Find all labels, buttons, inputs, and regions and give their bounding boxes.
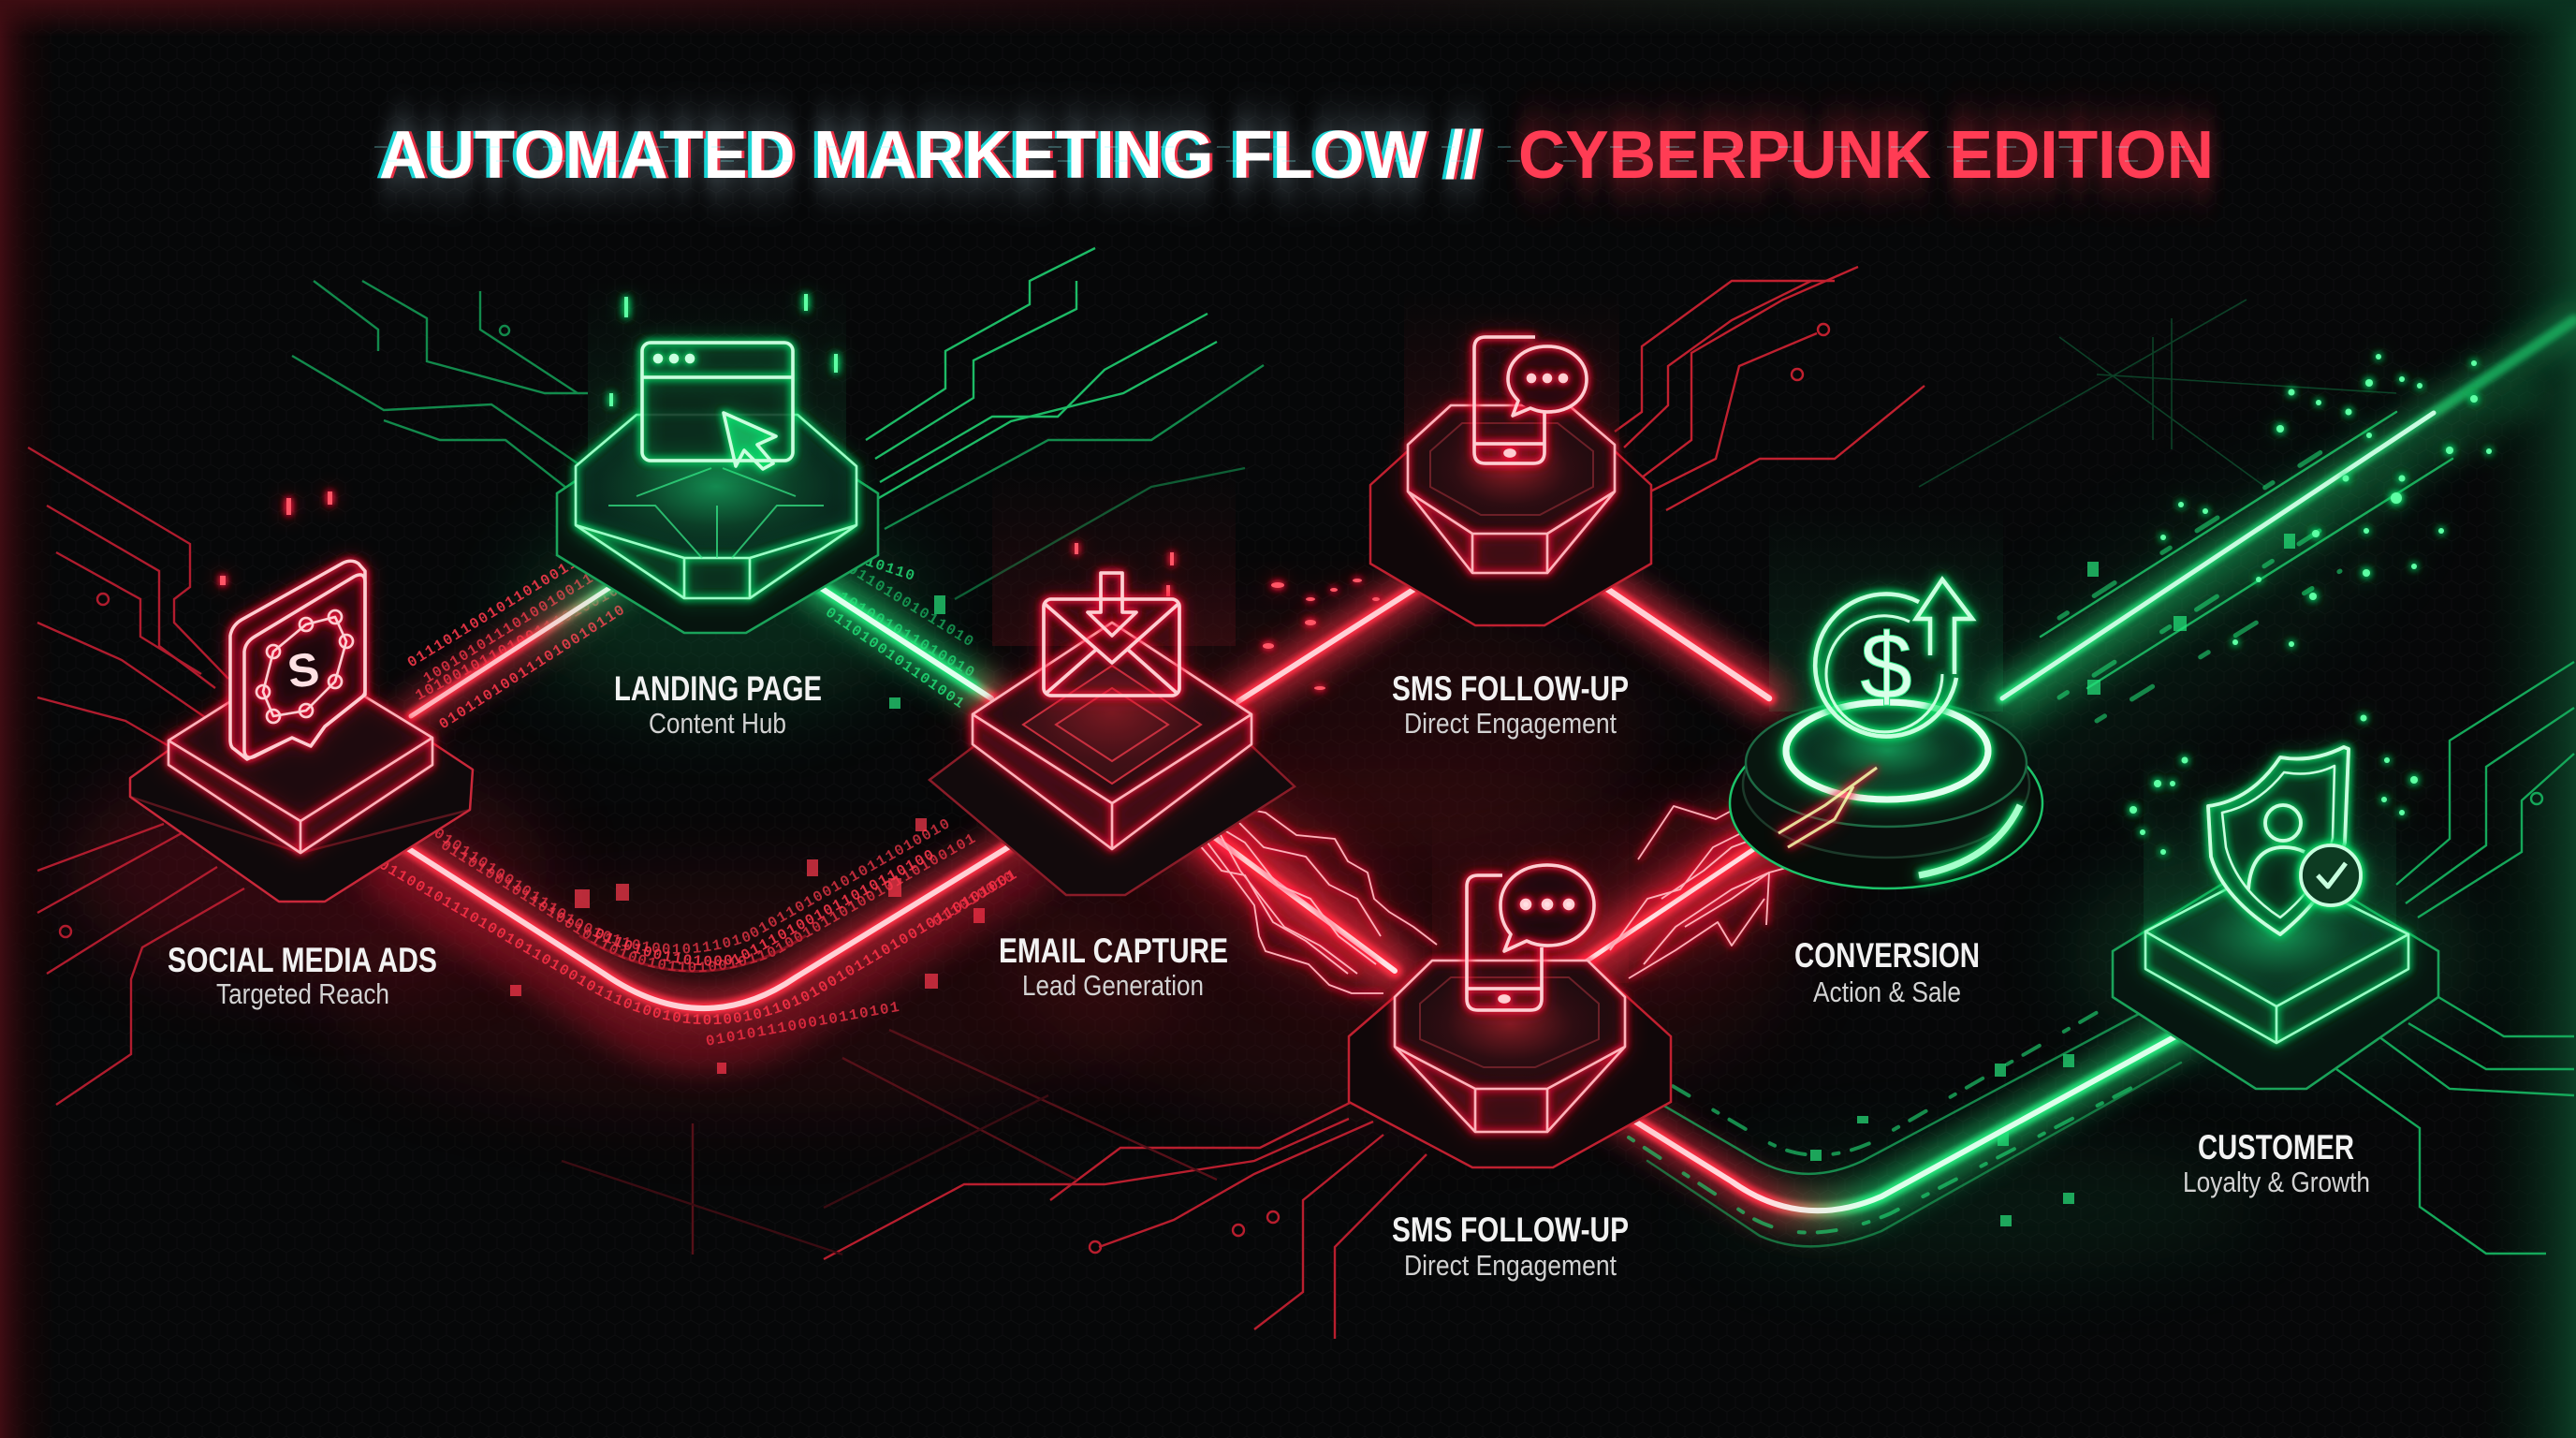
node: customer (2113, 747, 2438, 1089)
icon: check badge (2301, 845, 2361, 905)
plate top fill (2145, 866, 2408, 1006)
inner diamonds (1023, 666, 1201, 784)
plate side fill (2145, 932, 2408, 1043)
glowing ring (1786, 702, 1988, 800)
glass plate fill (168, 657, 432, 821)
binary data streams: 0111011001011010011101001011010101011010 (408, 563, 575, 667)
title glow (379, 118, 2214, 193)
label: social media ads: Targeted Reach (216, 977, 389, 1010)
platform base (2113, 852, 2438, 1089)
glass plate outline (168, 657, 432, 853)
binary data streams: 0110100101101001011010010110 (850, 568, 973, 645)
label: sms follow-up bottom (1392, 1211, 1629, 1282)
label: email capture (999, 932, 1228, 1002)
node: conversion (1730, 580, 2042, 888)
circuit traces: green upper (292, 248, 1264, 599)
icon: envelope with arrow (1044, 573, 1179, 696)
title glow: CYBERPUNK EDITION (1518, 118, 2214, 193)
node: landing page (557, 343, 878, 633)
binary data streams: 01101001011010010110100101101001011010010110100101101001011010010110100101101 (442, 833, 975, 972)
front face fill (1395, 1047, 1625, 1132)
plate side fill (973, 714, 1251, 849)
glitch ticks (374, 147, 2220, 161)
beam: social to landing (411, 580, 622, 716)
binary data streams: 10010110100101110100101101001011101001011010010101110100101101001011010010111010010110101 (434, 819, 949, 954)
label: social media ads: SOCIAL MEDIA ADS (168, 941, 437, 979)
binary data streams: 1010010110100101101001011010 (842, 593, 973, 676)
ring interior (1786, 702, 1988, 800)
octagon top fill (1395, 961, 1625, 1089)
label: social media ads (168, 941, 437, 1010)
label: customer: Loyalty & Growth (2183, 1166, 2370, 1198)
circuit traces: red upper right (1615, 267, 1925, 510)
title glow: AUTOMATED MARKETING FLOW // (379, 118, 1482, 193)
icon dollar sign: $ (1860, 614, 1912, 719)
title chromatic layers: AUTOMATED MARKETING FLOW // (382, 118, 1485, 193)
octagon outline (1408, 405, 1615, 573)
binary data streams: 01010111000101101010011 (0, 0, 902, 1050)
octagon base (557, 440, 878, 633)
label: sms follow-up top (1392, 669, 1629, 740)
binary data streams: 0101101001110100101101010110101001110101 (440, 605, 623, 728)
binary data streams: 1001010111010010011010110100101101101001 (423, 574, 593, 683)
faint green grid upper right (1919, 300, 2396, 487)
label: customer: CUSTOMER (2198, 1128, 2354, 1167)
binary data streams: 0110100101 (0, 0, 1018, 931)
beam: social to email lower route (381, 829, 1037, 1049)
label: customer (2183, 1128, 2370, 1198)
label: landing page: Content Hub (649, 707, 786, 740)
beam: email to sms top (1238, 580, 1429, 701)
icon: shield with user (2208, 747, 2349, 934)
light columns (588, 281, 2396, 983)
icon fill (642, 343, 793, 461)
label: landing page (614, 669, 822, 740)
octagon top fill (1408, 405, 1615, 534)
beam: sms bottom to conversion (1582, 767, 1877, 964)
green particles (609, 294, 2492, 855)
label: sms follow-up bottom: Direct Engagement (1404, 1249, 1617, 1282)
base rings (1730, 699, 2042, 888)
octagon front fill (576, 525, 856, 598)
label: email capture: Lead Generation (1022, 969, 1204, 1002)
binary data streams: 1010010110100111010010110101011010011010 (416, 590, 618, 700)
circuit traces: red left (28, 448, 244, 1105)
icon body fill (230, 561, 365, 759)
binary data streams: 0110100101101001011010010110 (827, 608, 963, 708)
node: sms follow-up bottom (1349, 865, 1671, 1167)
node: social media ads (130, 561, 473, 902)
data flow beams (381, 320, 2574, 1246)
node: email capture (929, 573, 1295, 895)
binary data streams: 01100101110100101101001011101001011010010110101001011101001011010100110101001011101010110100101101001011 (380, 862, 1017, 1024)
icon: phone with chat bubble (1474, 337, 1587, 463)
octagon outline (1395, 961, 1625, 1132)
plate outline (2145, 866, 2408, 1043)
glass plate side fill (168, 738, 432, 853)
bubble fill (1500, 865, 1594, 946)
beam: email to sms bottom (1164, 800, 1395, 971)
label: conversion: CONVERSION (1794, 936, 1980, 975)
label: sms follow-up bottom: SMS FOLLOW-UP (1392, 1211, 1629, 1249)
title (374, 118, 2220, 193)
bubble fill (1508, 346, 1587, 412)
node: sms follow-up top (1370, 337, 1651, 625)
icon: dollar coin with arrow (1815, 580, 1972, 737)
octagon outline (576, 415, 856, 598)
label: sms follow-up top: Direct Engagement (1404, 707, 1617, 740)
circuit traces: green right (2336, 662, 2574, 1254)
icon: browser window with cursor (642, 343, 793, 469)
sparks (220, 492, 1380, 690)
shield fill (2208, 747, 2349, 934)
label: conversion (1794, 936, 1980, 1008)
binary data streams: 0110100110100010111010010110101101001010110101001011100101101 (595, 850, 932, 966)
cursor fill (724, 413, 776, 469)
plate top fill (973, 623, 1251, 803)
platform base (929, 740, 1295, 895)
binary data streams: 1001011010010110 (865, 560, 914, 580)
beam: landing to email (808, 580, 991, 698)
data chips (510, 534, 2295, 1226)
platform base (130, 655, 473, 902)
icon: phone with chat bubble (1467, 865, 1594, 1010)
octagon base (1370, 412, 1651, 625)
octagon base (1349, 964, 1671, 1167)
beam: conversion outward (2002, 320, 2574, 730)
beam: sms top to conversion (1593, 580, 1769, 698)
icon letter S: S (285, 642, 322, 698)
inner octagon (1430, 423, 1593, 515)
front face fill (1408, 492, 1615, 573)
title chromatic layers: AUTOMATED MARKETING FLOW // (375, 118, 1478, 193)
label: conversion: Action & Sale (1813, 976, 1961, 1008)
circuit traces: red bottom (562, 1030, 1427, 1339)
beam: sms bottom to customer (1593, 1002, 2200, 1246)
inner octagon (1420, 977, 1599, 1067)
octagon top fill (576, 415, 856, 558)
circuit detail (608, 468, 824, 558)
label: sms follow-up top: SMS FOLLOW-UP (1392, 669, 1629, 708)
icon: social speech bubble with network (230, 561, 365, 759)
title part one: AUTOMATED MARKETING FLOW // (379, 118, 1482, 193)
label: landing page: LANDING PAGE (614, 669, 822, 708)
label: email capture: EMAIL CAPTURE (999, 932, 1228, 970)
plate outline (973, 623, 1251, 849)
title part two: CYBERPUNK EDITION (1518, 118, 2214, 193)
lightning over conversion ring (1778, 768, 1877, 847)
lightning arcs (1168, 780, 1847, 993)
